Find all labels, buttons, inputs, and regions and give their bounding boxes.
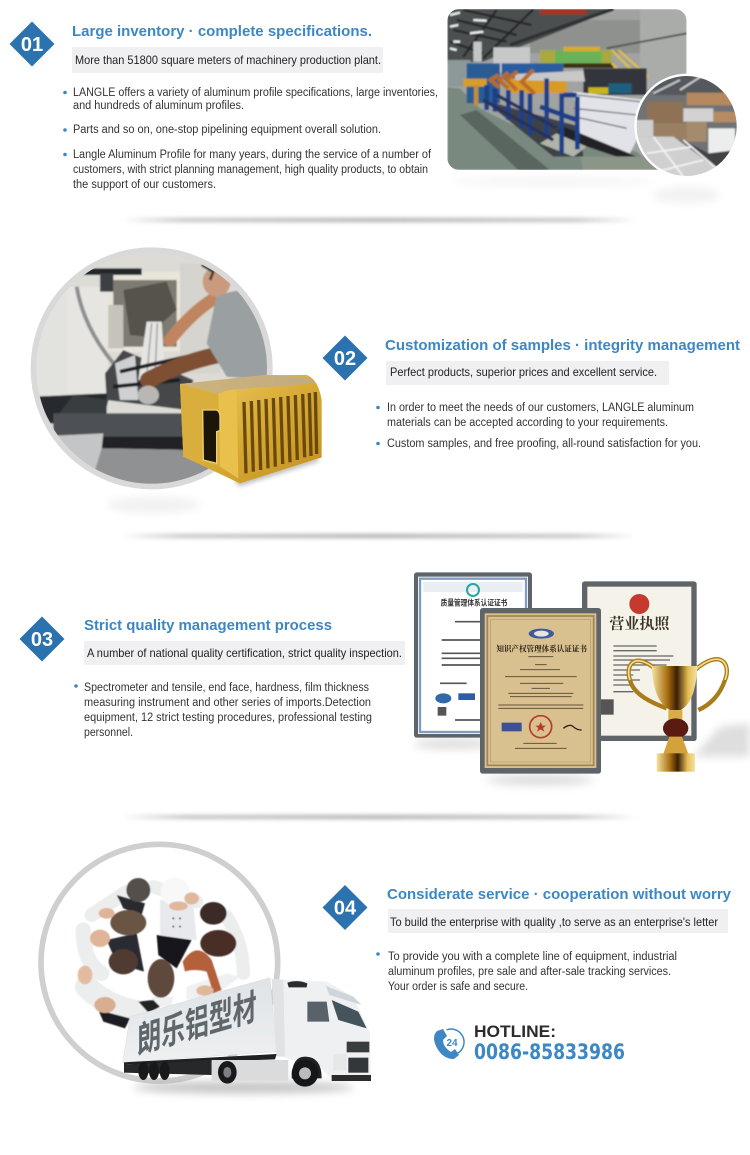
subheading 03 (84, 641, 405, 665)
certificate: quality management: 质量管理体系认证证书 (441, 598, 507, 608)
subheading 01 (72, 47, 383, 73)
panel: section 01 large inventory (10, 9, 739, 203)
bullet list 03: Spectrometer and tensile, end face, hardness, film thickness (84, 682, 369, 694)
hotline (434, 1022, 625, 1064)
bullet list 03: personnel. (84, 727, 133, 739)
trophy (629, 659, 727, 772)
bullet list 04 (376, 951, 677, 993)
icon: phone 24 (434, 1029, 464, 1059)
badge 02 (322, 336, 368, 380)
badge 02: 02 (334, 348, 356, 370)
panel: section 03 quality management (20, 572, 750, 785)
bullet list 01: LANGLE offers a variety of aluminum profile specifications, large inventories, (73, 87, 438, 99)
badge 03: 03 (31, 629, 53, 651)
divider 3 (122, 814, 636, 820)
subheading 02: Perfect products, superior prices and excellent service. (390, 365, 657, 379)
gold profile (180, 375, 322, 483)
certificate: intellectual property: 知识产权管理体系认证证书 (496, 644, 588, 654)
bullet list 01: Langle Aluminum Profile for many years, during the service of a number of (73, 149, 432, 161)
bullet list 02: Custom samples, and free proofing, all-round satisfaction for you. (387, 438, 701, 450)
bullet list 01: Parts and so on, one-stop pipelining equipment overall solution. (73, 124, 381, 136)
subheading 01: More than 51800 square meters of machinery production plant. (75, 53, 381, 67)
bullet list 01: customers, with strict planning management, high quality products, to obtain (73, 164, 428, 176)
hotline number: 0086-85833986 (474, 1040, 625, 1064)
bullet list 04: Your order is safe and secure. (388, 981, 528, 993)
hotline label: HOTLINE: (474, 1022, 556, 1041)
badge 04 (322, 885, 368, 930)
bullet list 03 (74, 682, 372, 739)
heading 01: Large inventory · complete specifications. (72, 23, 372, 40)
team huddle (78, 878, 243, 1028)
bullet list 02: In order to meet the needs of our customers, LANGLE aluminum (387, 402, 694, 414)
badge 04: 04 (334, 898, 357, 920)
divider 1 (122, 218, 636, 222)
certificate: business license: 营业执照 (609, 615, 671, 633)
divider 2 (122, 534, 636, 538)
bullet list 03: equipment, 12 strict testing procedures, professional testing (84, 712, 372, 724)
bullet list 02 (376, 402, 701, 450)
bullet list 03: measuring instrument and other series of imports.Detection (84, 697, 371, 709)
illustration: team and truck (41, 844, 371, 1093)
heading 03: Strict quality management process (84, 617, 332, 634)
badge 01: 01 (21, 34, 43, 56)
truck (123, 978, 371, 1087)
photo: aluminum production plant (447, 9, 739, 203)
subheading 02 (386, 361, 669, 385)
heading 04: Considerate service · cooperation without worry (387, 886, 732, 903)
badge 01 (10, 22, 54, 66)
certificate: intellectual property (480, 608, 601, 774)
subheading 03: A number of national quality certification, strict quality inspection. (87, 646, 402, 660)
bullet list 01: the support of our customers. (73, 179, 216, 191)
heading 02: Customization of samples · integrity management (385, 337, 740, 354)
icon: phone 24: 24 (446, 1038, 458, 1049)
subheading 04 (388, 909, 728, 933)
truck: 朗乐铝型材 (137, 986, 257, 1061)
certificate: business license (582, 581, 697, 741)
bullet list 04: To provide you with a complete line of equipment, industrial (388, 951, 677, 963)
certificate: quality management (414, 572, 532, 738)
bullet list 01: and hundreds of aluminum profiles. (73, 100, 244, 112)
badge 03 (20, 616, 64, 662)
panel: section 04 considerate service (41, 844, 732, 1093)
bullet list 01 (63, 87, 438, 191)
bullet list 04: aluminum profiles, pre sale and after-sale tracking services. (388, 966, 671, 978)
subheading 04: To build the enterprise with quality ,to serve as an enterprise's letter (390, 915, 718, 929)
photo: machining with gold profile (33, 250, 322, 513)
certificates and trophy (413, 572, 750, 785)
panel: section 02 customization (33, 250, 740, 513)
bullet list 02: materials can be accepted according to your requirements. (387, 417, 668, 429)
